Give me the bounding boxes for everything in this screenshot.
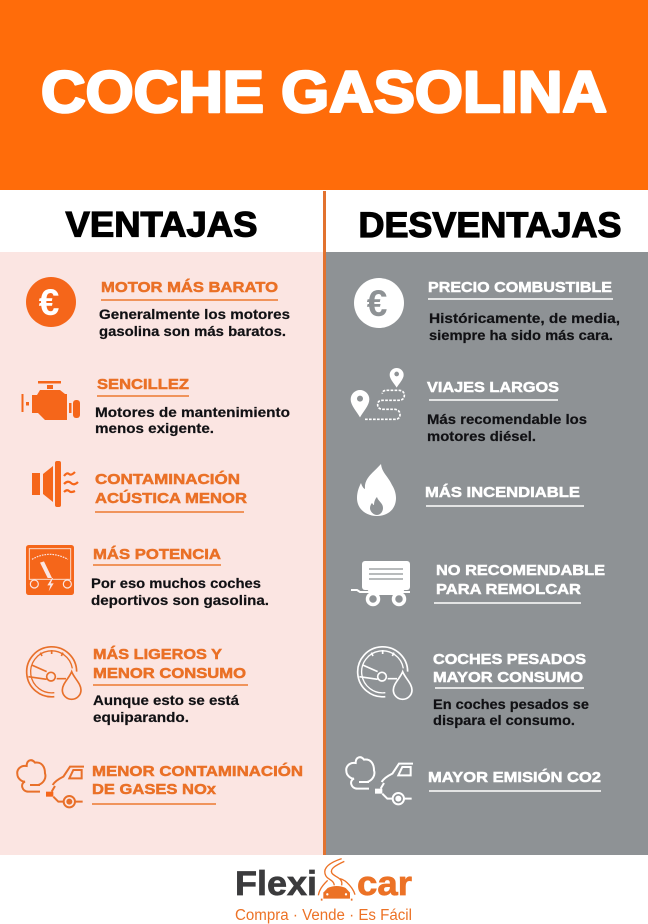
item: contaminación acústica menor <box>95 470 247 512</box>
item: precio combustible: Históricamente, de media, <box>429 311 620 326</box>
logo: flexicar <box>235 859 412 924</box>
item: motor más barato: Generalmente los motores <box>99 307 290 322</box>
item: precio combustible <box>428 279 620 343</box>
item: más potencia: MÁS POTENCIA <box>93 546 221 563</box>
item: sencillez <box>95 376 290 436</box>
header banner <box>0 0 648 190</box>
icon: car exhaust cloud orange <box>17 760 84 807</box>
item: viajes largos: motores diésel. <box>427 429 536 444</box>
item: menor contaminación de gases nox: DE GASES NOx <box>92 781 217 798</box>
panel: ventajas background <box>0 252 324 855</box>
icon: euro coin orange <box>26 277 76 327</box>
item: más ligeros y menor consumo <box>93 646 248 725</box>
item: precio combustible: siempre ha sido más cara. <box>429 328 613 343</box>
icon: speaker noise <box>32 461 78 507</box>
item: menor contaminación de gases nox: MENOR CONTAMINACIÓN <box>92 762 303 780</box>
title: COCHE GASOLINA <box>41 60 607 125</box>
item: no recomendable para remolcar: PARA REMOLCAR <box>436 581 581 598</box>
tagline: Compra · Vende · Es Fácil <box>235 907 412 924</box>
icon: gauge and fuel drop white <box>358 647 412 699</box>
item: coches pesados mayor consumo: dispara el consumo. <box>433 713 575 728</box>
item: precio combustible: PRECIO COMBUSTIBLE <box>428 279 612 296</box>
item: motor más barato <box>99 279 290 339</box>
item: coches pesados mayor consumo: COCHES PESADOS <box>433 651 586 668</box>
item: menor contaminación de gases nox <box>92 762 303 804</box>
item: contaminación acústica menor: ACÚSTICA MENOR <box>95 489 247 507</box>
item: sencillez: menos exigente. <box>95 421 214 436</box>
item: viajes largos: Más recomendable los <box>427 412 587 427</box>
item: más ligeros y menor consumo: MÁS LIGEROS Y <box>93 646 222 663</box>
column divider <box>323 191 326 855</box>
item: más ligeros y menor consumo: Aunque esto se está <box>93 693 240 708</box>
icon: gauge and fuel drop orange <box>27 647 81 699</box>
item: no recomendable para remolcar: NO RECOMENDABLE <box>436 562 605 579</box>
logo: flexicar: Flexi <box>235 865 317 903</box>
item: sencillez: Motores de mantenimiento <box>95 405 290 420</box>
item: sencillez: SENCILLEZ <box>97 376 189 393</box>
icon: car exhaust cloud white <box>346 757 413 804</box>
item: más potencia: Por eso muchos coches <box>91 576 261 591</box>
icon: trailer <box>351 561 410 604</box>
item: viajes largos: VIAJES LARGOS <box>427 379 559 396</box>
icon: engine <box>22 381 80 420</box>
icon: euro coin white: € <box>367 283 387 324</box>
item: más ligeros y menor consumo: MENOR CONSUMO <box>93 665 246 682</box>
item: más potencia <box>91 546 269 608</box>
logo: flexicar: car <box>357 865 412 903</box>
item: motor más barato: gasolina son más baratos. <box>99 324 286 339</box>
icon: euro coin orange: € <box>39 282 59 323</box>
panel: desventajas background <box>325 252 648 855</box>
icon: map route <box>351 368 404 419</box>
icon: flame <box>357 464 396 516</box>
item: contaminación acústica menor: CONTAMINACIÓN <box>95 470 240 488</box>
item: más ligeros y menor consumo: equiparando. <box>93 710 189 725</box>
item: viajes largos <box>427 379 587 444</box>
item: coches pesados mayor consumo: MAYOR CONSUMO <box>433 669 583 686</box>
icon: power meter <box>26 545 74 595</box>
icon: euro coin white <box>354 278 404 328</box>
item: motor más barato: MOTOR MÁS BARATO <box>101 279 278 296</box>
icon: car on winding road <box>318 859 355 901</box>
item: no recomendable para remolcar <box>434 562 605 603</box>
item: mayor emisión co2: MAYOR EMISIÓN CO2 <box>428 768 601 786</box>
item: coches pesados mayor consumo <box>433 651 590 728</box>
item: más incendiable: MÁS INCENDIABLE <box>425 484 580 501</box>
heading: desventajas: DESVENTAJAS <box>358 206 622 245</box>
item: más potencia: deportivos son gasolina. <box>91 593 269 608</box>
heading: ventajas: VENTAJAS <box>66 206 258 244</box>
item: coches pesados mayor consumo: En coches pesados se <box>433 697 590 712</box>
